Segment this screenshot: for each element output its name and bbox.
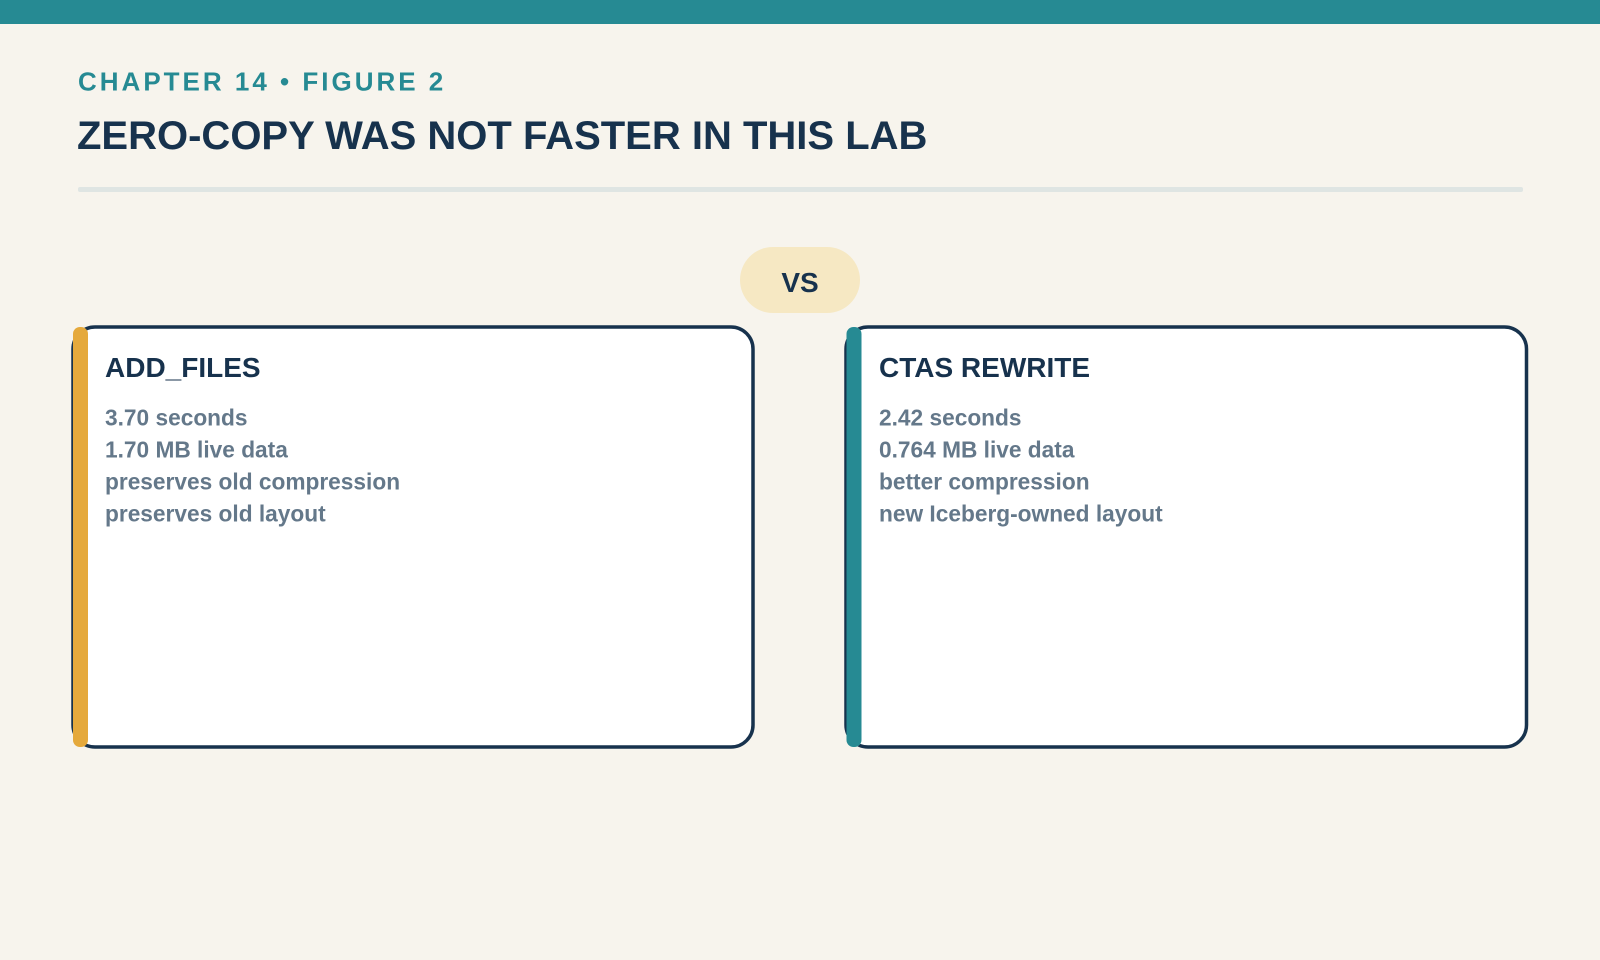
text block: ctas metrics: 2.42 seconds	[879, 404, 1022, 430]
text block: add_files metrics: preserves old compression	[105, 468, 400, 494]
text block: add_files metrics: preserves old layout	[105, 500, 326, 526]
panel: add_files	[73, 327, 753, 747]
text block: add_files metrics: 3.70 seconds	[105, 404, 248, 430]
eyebrow: CHAPTER 14 • FIGURE 2	[78, 66, 446, 96]
text block: add_files metrics	[105, 404, 400, 526]
text block: ctas metrics: 0.764 MB live data	[879, 436, 1075, 462]
title: ZERO-COPY WAS NOT FASTER IN THIS LAB	[77, 114, 927, 158]
vs badge	[740, 247, 860, 313]
top band	[0, 0, 1600, 24]
heading: add_files: ADD_FILES	[105, 352, 261, 383]
accent bar: add_files	[73, 327, 88, 747]
text block: add_files metrics: 1.70 MB live data	[105, 436, 288, 462]
vs badge: VS	[781, 267, 819, 298]
text block: ctas metrics: new Iceberg-owned layout	[879, 500, 1163, 526]
accent bar: ctas rewrite	[846, 327, 862, 747]
panel: ctas rewrite	[846, 327, 1526, 747]
text block: ctas metrics	[879, 404, 1163, 526]
text block: ctas metrics: better compression	[879, 468, 1090, 494]
heading: ctas rewrite: CTAS REWRITE	[879, 352, 1090, 383]
